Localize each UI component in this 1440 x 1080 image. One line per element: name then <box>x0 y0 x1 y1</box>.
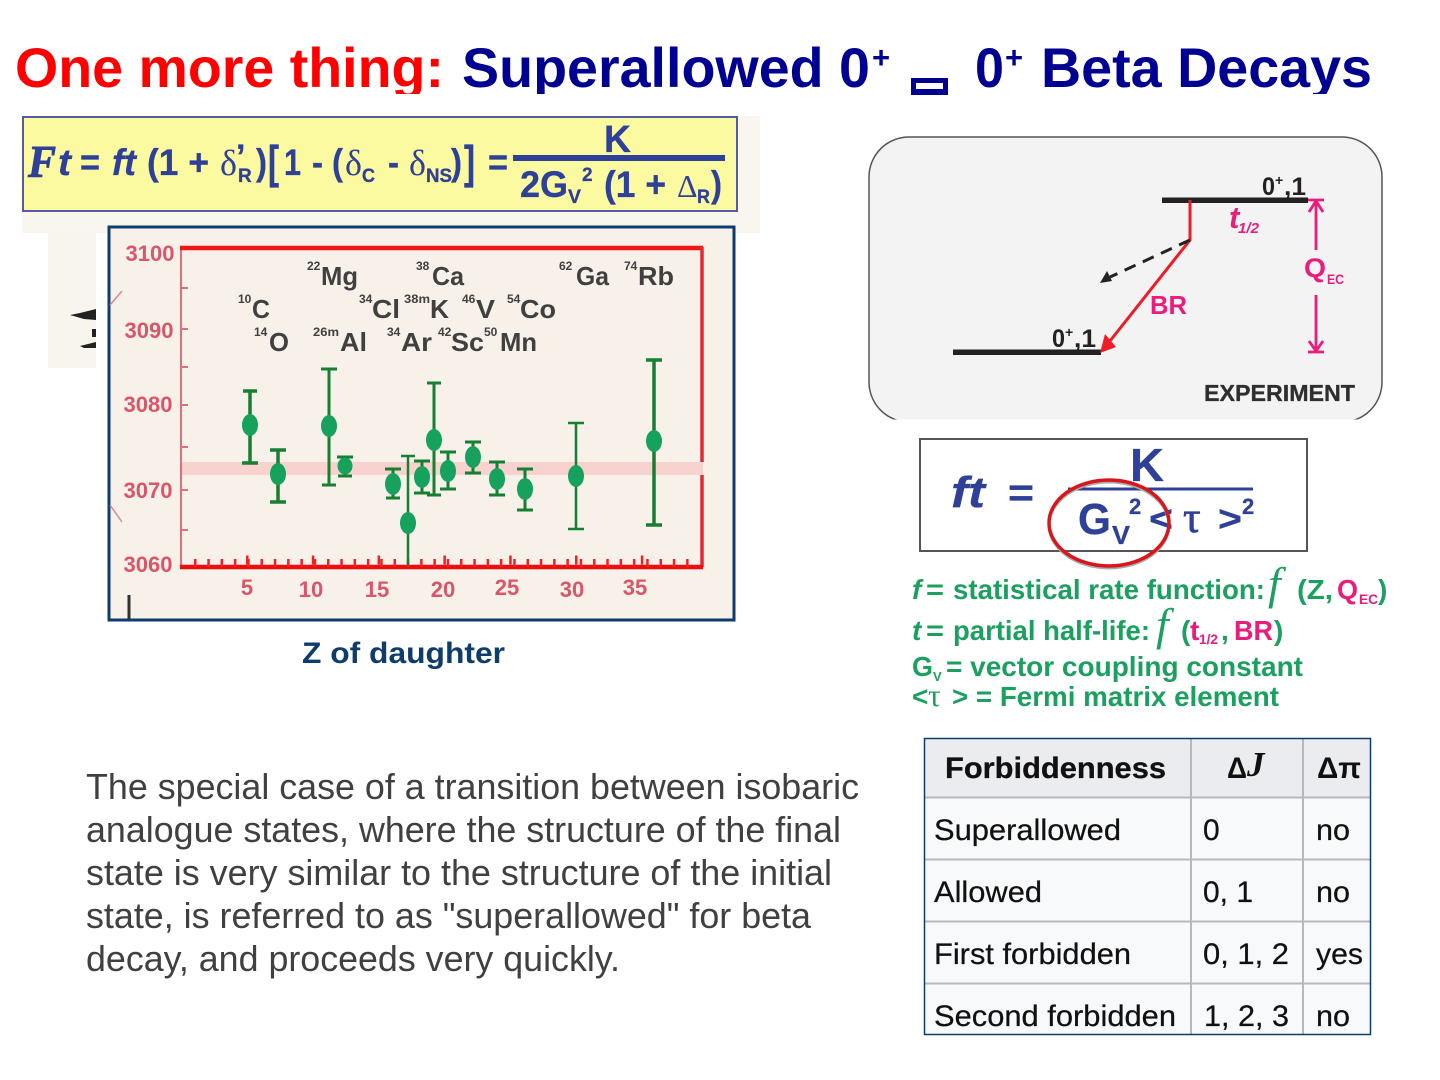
panel: ft formula: 2 <box>1129 494 1141 519</box>
table header: Forbiddenness <box>945 752 1166 785</box>
table rows: yes <box>1316 938 1363 971</box>
artifact: cropped image fragment <box>48 233 96 368</box>
body text <box>86 766 859 979</box>
x axis labels: 5 <box>241 575 253 600</box>
title: + <box>872 40 890 75</box>
panel: ft formula: K <box>1130 439 1164 491</box>
table rows: 1, 2, 3 <box>1204 1000 1289 1033</box>
error bars <box>242 360 662 565</box>
y axis labels: 3090 <box>125 318 173 343</box>
panel: master formula: R <box>697 187 710 208</box>
energy levels: 0 <box>1262 173 1275 201</box>
table rows: Allowed <box>934 876 1042 909</box>
arrow: QEC <box>1308 200 1324 352</box>
legend: variable definitions: t <box>912 615 923 646</box>
legend: variable definitions: f <box>1268 558 1287 609</box>
title: One more thing: <box>15 36 444 99</box>
isotope labels: Ar <box>401 327 432 357</box>
table rows: 0, 1 <box>1203 876 1253 909</box>
panel: master formula <box>22 116 760 233</box>
isotope labels: 38m <box>404 292 430 306</box>
labels: 1/2 <box>1238 220 1260 237</box>
legend: variable definitions: τ <box>928 677 941 713</box>
panel: ft formula: G <box>1078 495 1111 544</box>
table rows: First forbidden <box>934 938 1131 971</box>
energy levels: 0 <box>1052 325 1065 353</box>
table rows: Second forbidden <box>934 1000 1176 1033</box>
y axis labels: 3100 <box>126 241 174 266</box>
legend: variable definitions: = vector coupling constant <box>946 651 1303 682</box>
isotope labels: 46 <box>462 292 476 306</box>
legend: variable definitions: = <box>926 574 944 605</box>
legend: variable definitions: V <box>933 669 942 684</box>
legend: variable definitions: = <box>926 615 944 646</box>
isotope labels: C <box>252 294 270 324</box>
x axis labels: 20 <box>431 577 455 602</box>
x axis labels: 10 <box>299 577 323 602</box>
panel: experiment decay scheme <box>860 137 1390 428</box>
isotope labels: Sc <box>451 327 484 357</box>
legend: variable definitions: statistical rate function: <box>953 574 1265 605</box>
labels: Q <box>1304 253 1326 283</box>
panel: ft formula: τ <box>1183 493 1201 542</box>
panel: ft formula: < <box>1149 498 1173 539</box>
panel: master formula: V <box>568 187 581 208</box>
panel: master formula: (1 + <box>604 164 666 205</box>
x axis labels: 15 <box>365 577 389 602</box>
table rows: no <box>1316 814 1350 847</box>
panel: master formula: = <box>80 142 100 183</box>
panel: master formula: C <box>362 166 375 187</box>
x axis labels: 25 <box>495 575 519 600</box>
isotope labels: 38 <box>416 259 430 273</box>
panel: master formula: - <box>312 142 323 183</box>
body text: The special case of a transition between isobaric <box>86 766 859 807</box>
table header: J <box>1246 745 1266 784</box>
panel: master formula: ft <box>112 142 138 183</box>
chart: Ft values vs Z of daughter <box>109 227 734 620</box>
legend: variable definitions: f <box>912 574 924 605</box>
energy levels: + <box>1275 172 1283 188</box>
panel: master formula: 2 <box>582 165 593 186</box>
panel: master formula: NS <box>426 166 452 187</box>
table rows: no <box>1316 876 1350 909</box>
y axis labels: 3060 <box>124 552 172 577</box>
legend: variable definitions: t <box>1190 615 1199 646</box>
y axis labels <box>124 241 174 577</box>
legend: variable definitions: ) <box>1274 615 1283 646</box>
isotope labels: Rb <box>638 261 674 291</box>
panel: master formula: δ <box>409 143 426 183</box>
labels: BR <box>1150 290 1187 320</box>
title: Superallowed 0 <box>462 36 870 99</box>
legend: variable definitions: BR <box>1234 615 1273 646</box>
body text: state, is referred to as "superallowed" for beta <box>86 895 812 936</box>
legend: variable definitions <box>912 558 1387 713</box>
legend: variable definitions: 1/2 <box>1199 631 1218 647</box>
data points <box>242 414 662 534</box>
isotope labels: V <box>476 294 496 324</box>
icon: missing arrow glyph box <box>911 78 948 95</box>
title <box>17 46 1370 94</box>
isotope labels: 26m <box>313 325 339 339</box>
isotope labels: Ca <box>432 261 465 291</box>
x axis labels <box>241 575 647 602</box>
isotope labels: 14 <box>254 325 268 339</box>
legend: variable definitions: f <box>1156 599 1175 650</box>
table: forbiddenness <box>924 738 1370 1034</box>
isotope labels: 74 <box>624 259 638 273</box>
isotope labels: Mn <box>500 327 537 357</box>
panel: master formula: (1 + <box>147 142 209 183</box>
title: Beta Decays <box>1041 36 1372 99</box>
panel: master formula: ) <box>256 142 267 183</box>
energy levels: ,1 <box>1074 325 1096 353</box>
panel: ft formula: V <box>1112 520 1131 550</box>
panel: master formula: [ <box>268 136 279 188</box>
isotope labels: Cl <box>372 294 400 324</box>
legend: variable definitions: , <box>1221 615 1229 646</box>
isotope labels: 34 <box>387 325 401 339</box>
legend: variable definitions: EC <box>1359 591 1378 607</box>
y axis labels: 3080 <box>124 392 172 417</box>
isotope labels: 62 <box>559 259 573 273</box>
panel: master formula: K <box>604 119 632 161</box>
isotope labels: Co <box>520 294 556 324</box>
energy levels: + <box>1065 324 1073 340</box>
panel: master formula: = <box>488 142 508 183</box>
panel: master formula: Δ <box>677 168 698 204</box>
isotope labels: O <box>269 327 289 357</box>
panel: ft formula: 2 <box>1242 494 1254 519</box>
axis caption: Z of daughter <box>302 637 505 670</box>
highlight circle <box>1049 480 1169 568</box>
panel: master formula: ’ <box>236 138 245 176</box>
plateau band <box>181 462 703 475</box>
isotope labels <box>238 259 674 357</box>
chart axes <box>180 247 703 567</box>
isotope labels: 42 <box>438 325 452 339</box>
body text: state is very similar to the structure of the initial <box>86 852 832 893</box>
isotope labels: Mg <box>321 261 358 291</box>
isotope labels: Ga <box>576 261 610 291</box>
table header: Δ <box>1227 752 1247 785</box>
legend: variable definitions: ( <box>1181 615 1191 646</box>
body text: analogue states, where the structure of the final <box>86 809 841 850</box>
labels: EC <box>1327 271 1344 287</box>
panel: master formula: 2G <box>520 164 568 205</box>
isotope labels: K <box>430 294 449 324</box>
panel: ft formula: > <box>1218 498 1242 539</box>
panel: master formula: ( <box>332 142 344 183</box>
legend: variable definitions: G <box>912 651 933 682</box>
panel: master formula: - <box>388 142 399 183</box>
panel: master formula: δ <box>345 143 362 183</box>
labels <box>1150 200 1355 406</box>
table rows: 0 <box>1203 814 1220 847</box>
isotope labels: Al <box>340 327 367 357</box>
legend: variable definitions: (Z, <box>1297 574 1333 605</box>
table header <box>945 745 1361 785</box>
panel: master formula: δ <box>220 143 237 183</box>
panel: master formula: ) <box>711 164 722 205</box>
panel: master formula: F <box>27 136 56 187</box>
legend: variable definitions: partial half-life: <box>953 615 1150 646</box>
legend: variable definitions: Q <box>1337 574 1358 605</box>
labels: t <box>1229 200 1241 235</box>
arrow: dashed branch <box>1100 240 1190 283</box>
energy levels: ,1 <box>1284 173 1306 201</box>
isotope labels: 34 <box>359 292 373 306</box>
x axis labels: 35 <box>623 575 647 600</box>
energy levels <box>953 172 1308 355</box>
isotope labels: 54 <box>507 292 521 306</box>
y axis labels: 3070 <box>124 478 172 503</box>
panel: ft formula: ft <box>951 468 988 517</box>
table rows: 0, 1, 2 <box>1203 938 1289 971</box>
legend: variable definitions: > = Fermi matrix element <box>952 681 1279 712</box>
table rows: no <box>1316 1000 1350 1033</box>
panel: master formula: R <box>238 166 252 187</box>
isotope labels: 50 <box>484 325 498 339</box>
arrow: BR decay <box>1100 200 1190 353</box>
panel: ft formula <box>920 439 1307 568</box>
panel: master formula: ] <box>464 136 475 188</box>
table rows <box>934 814 1363 1033</box>
panel: master formula: t <box>58 142 73 183</box>
panel: master formula: ) <box>451 142 462 183</box>
table rows: Superallowed <box>934 814 1121 847</box>
isotope labels: 10 <box>238 292 252 306</box>
body text: decay, and proceeds very quickly. <box>86 938 620 979</box>
title: + <box>1005 40 1023 75</box>
panel: ft formula: = <box>1008 471 1034 515</box>
panel: master formula: 1 <box>284 142 301 183</box>
x axis labels: 30 <box>560 577 584 602</box>
legend: variable definitions: ) <box>1378 574 1387 605</box>
labels: EXPERIMENT <box>1204 380 1355 406</box>
isotope labels: 22 <box>307 259 321 273</box>
table header: Δπ <box>1317 752 1361 785</box>
title: 0 <box>975 36 1004 99</box>
legend: variable definitions: < <box>912 681 928 712</box>
